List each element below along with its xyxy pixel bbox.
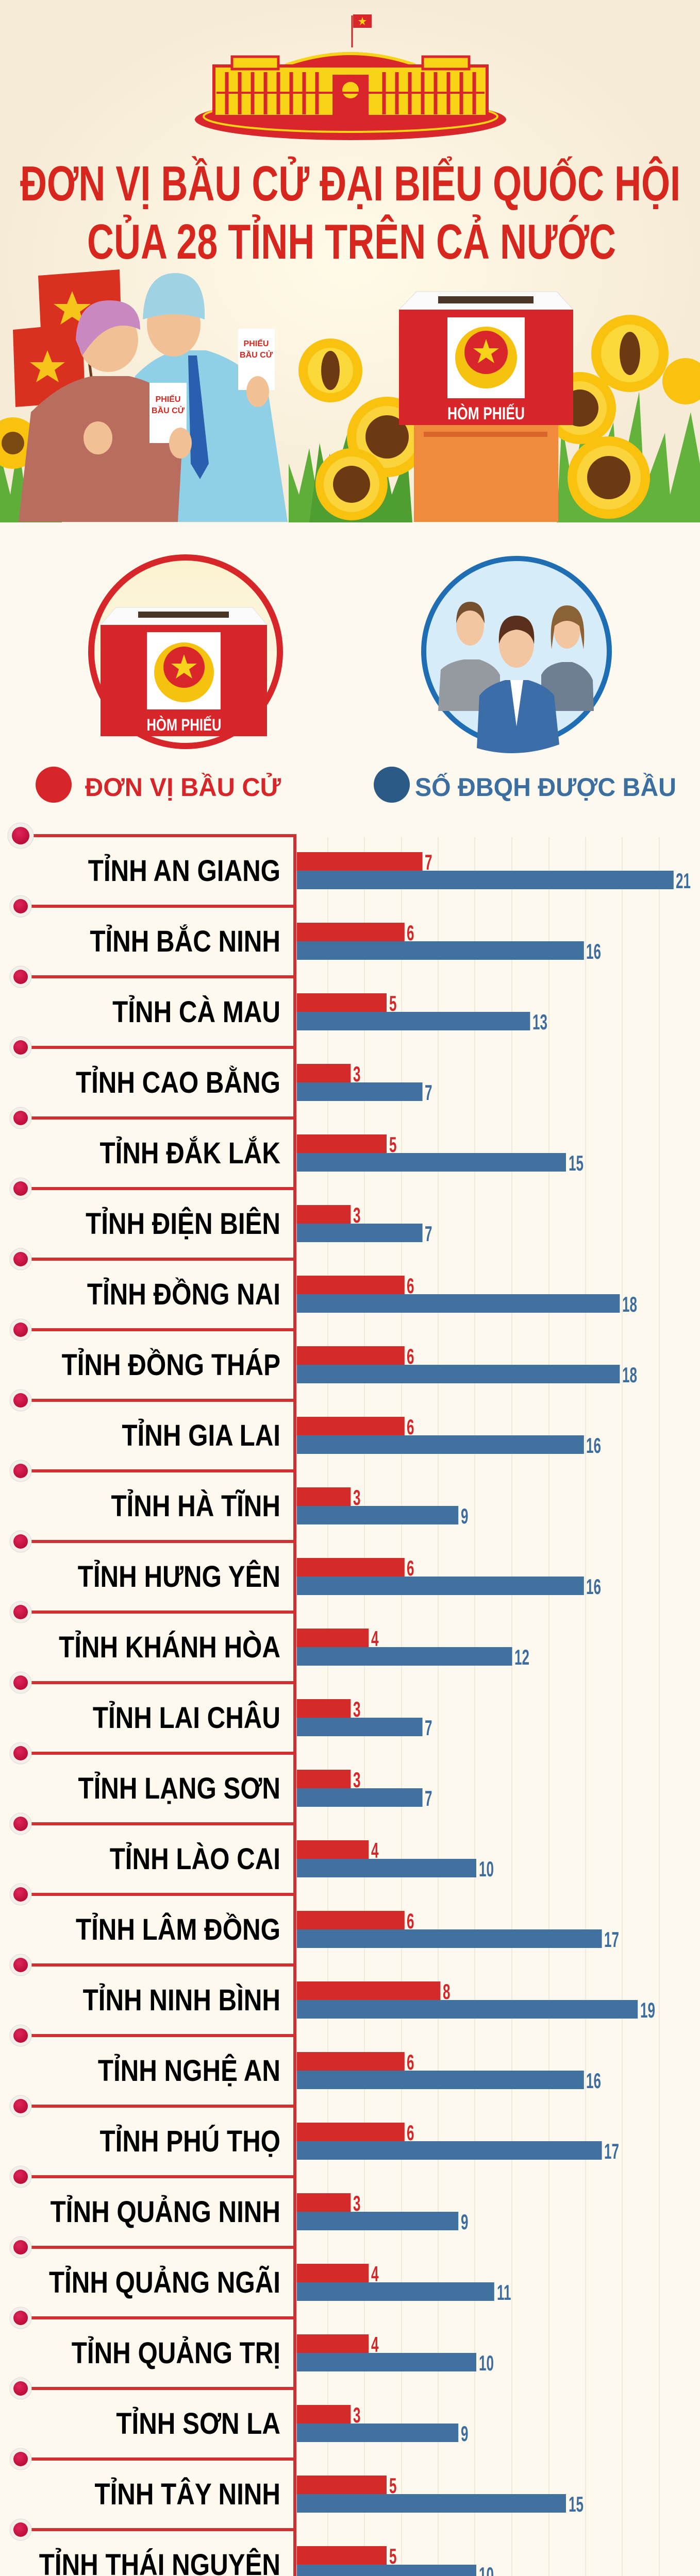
row: Đồng Tháp: 18 xyxy=(622,1363,637,1387)
row: Hà Tĩnh: 3 xyxy=(353,1486,360,1510)
illustration: woman voter xyxy=(19,300,192,522)
row: Điện Biên xyxy=(10,1178,432,1246)
row: An Giang xyxy=(8,823,691,893)
row: Cà Mau xyxy=(10,966,547,1035)
row: Đồng Tháp: 6 xyxy=(407,1345,414,1369)
row: Khánh Hòa: 12 xyxy=(514,1646,529,1670)
row: Điện Biên: 3 xyxy=(353,1204,360,1228)
illustration: woman voter: PHIẾU xyxy=(156,394,180,404)
illustration: sunflowers xyxy=(0,315,700,520)
row: Nghệ An: TỈNH NGHỆ AN xyxy=(98,2054,280,2088)
row: Hưng Yên xyxy=(10,1531,601,1599)
row: Khánh Hòa: TỈNH KHÁNH HÒA xyxy=(59,1631,280,1664)
row: Sơn La: 3 xyxy=(353,2403,360,2428)
row: Cà Mau: 13 xyxy=(532,1010,547,1035)
row: Lào Cai: 4 xyxy=(371,1839,379,1863)
row: Ninh Bình: TỈNH NINH BÌNH xyxy=(83,1984,280,2017)
row: Cao Bằng: 7 xyxy=(425,1081,432,1105)
row: Quảng Ninh: 9 xyxy=(461,2210,468,2234)
row: Gia Lai: 16 xyxy=(586,1434,601,1458)
row: Hưng Yên: 6 xyxy=(407,1556,414,1581)
row: Lào Cai xyxy=(10,1813,494,1882)
row: Lào Cai: TỈNH LÀO CAI xyxy=(110,1842,280,1876)
illustration: grass xyxy=(0,392,700,522)
row: Hưng Yên: TỈNH HƯNG YÊN xyxy=(78,1560,280,1594)
row: Bắc Ninh: 16 xyxy=(586,940,601,964)
row: Phú Thọ: 17 xyxy=(604,2140,619,2164)
row: An Giang: 7 xyxy=(425,851,432,875)
chart: rows xyxy=(8,823,691,2576)
row: Thái Nguyên xyxy=(10,2519,494,2576)
row: Quảng Ninh: TỈNH QUẢNG NINH xyxy=(51,2195,280,2229)
row: Lào Cai: 10 xyxy=(479,1857,494,1882)
row: Ninh Bình: 19 xyxy=(640,1998,655,2023)
row: Đồng Nai xyxy=(10,1248,637,1317)
title xyxy=(20,156,680,269)
illustration: ballot box: HÒM PHIẾU xyxy=(447,404,525,423)
row: Cao Bằng xyxy=(10,1037,432,1105)
row: Sơn La xyxy=(10,2378,468,2446)
row: Quảng Ninh: 3 xyxy=(353,2192,360,2216)
row: Hưng Yên: 16 xyxy=(586,1575,601,1599)
row: Hà Tĩnh: 9 xyxy=(461,1504,468,1529)
row: Quảng Ngãi: TỈNH QUẢNG NGÃI xyxy=(49,2266,280,2299)
row: Quảng Trị xyxy=(10,2307,494,2376)
row: Cà Mau: TỈNH CÀ MAU xyxy=(112,995,280,1029)
row: Bắc Ninh: TỈNH BẮC NINH xyxy=(90,924,280,958)
row: Tây Ninh: 5 xyxy=(389,2474,396,2498)
row: Quảng Ngãi: 11 xyxy=(497,2281,511,2305)
row: Quảng Trị: 4 xyxy=(371,2333,379,2357)
row: Tây Ninh: TỈNH TÂY NINH xyxy=(94,2477,280,2511)
row: Bắc Ninh: 6 xyxy=(407,921,414,945)
row: Gia Lai xyxy=(10,1389,601,1458)
row: Lạng Sơn: 3 xyxy=(353,1768,360,1792)
row: Thái Nguyên: 5 xyxy=(389,2545,396,2569)
legend: số đbqh được bầu xyxy=(374,767,676,803)
row: Sơn La: 9 xyxy=(461,2422,468,2446)
row: Phú Thọ: TỈNH PHÚ THỌ xyxy=(100,2125,280,2158)
row: Khánh Hòa: 4 xyxy=(371,1627,379,1651)
header background xyxy=(0,0,700,522)
legend: đơn vị bầu cử: ĐƠN VỊ BẦU CỬ xyxy=(85,772,281,802)
row: Bắc Ninh xyxy=(10,895,601,964)
row: Lâm Đồng: TỈNH LÂM ĐỒNG xyxy=(76,1912,280,1946)
row: Lâm Đồng: 17 xyxy=(604,1928,619,1952)
row: Nghệ An: 16 xyxy=(586,2069,601,2093)
row: Đồng Nai: 18 xyxy=(622,1293,637,1317)
row: Phú Thọ: 6 xyxy=(407,2121,414,2145)
row: Đắk Lắk: 15 xyxy=(569,1151,584,1176)
legend icon: ballot box circle: HÒM PHIẾU xyxy=(146,716,222,734)
row: Đắk Lắk: 5 xyxy=(389,1133,396,1157)
row: Cao Bằng: TỈNH CAO BẰNG xyxy=(76,1066,280,1099)
row: Đồng Nai: TỈNH ĐỒNG NAI xyxy=(87,1278,280,1311)
row: An Giang: TỈNH AN GIANG xyxy=(88,854,280,888)
row: Quảng Trị: TỈNH QUẢNG TRỊ xyxy=(72,2336,280,2370)
row: Gia Lai: TỈNH GIA LAI xyxy=(122,1419,280,1452)
row: Lâm Đồng xyxy=(10,1884,619,1952)
logo: national assembly building xyxy=(195,14,506,140)
row: Hà Tĩnh: TỈNH HÀ TĨNH xyxy=(111,1489,280,1523)
row: Nghệ An xyxy=(10,2025,601,2093)
row: Lai Châu: 3 xyxy=(353,1698,360,1722)
row: Ninh Bình: 8 xyxy=(443,1980,450,2004)
row: Quảng Ngãi xyxy=(10,2236,511,2305)
row: Đồng Tháp xyxy=(10,1319,637,1387)
row: Ninh Bình xyxy=(10,1954,655,2023)
row: Đồng Tháp: TỈNH ĐỒNG THÁP xyxy=(62,1348,280,1382)
row: Điện Biên: TỈNH ĐIỆN BIÊN xyxy=(86,1207,280,1241)
legend: đơn vị bầu cử xyxy=(36,767,281,803)
row: Lai Châu: TỈNH LAI CHÂU xyxy=(93,1701,280,1735)
row: Tây Ninh xyxy=(10,2448,584,2517)
row: An Giang: 21 xyxy=(676,869,691,893)
row: Tây Ninh: 15 xyxy=(569,2493,584,2517)
row: Lai Châu: 7 xyxy=(425,1716,432,1740)
row: Sơn La: TỈNH SƠN LA xyxy=(116,2407,280,2441)
row: Quảng Ninh xyxy=(10,2166,468,2234)
row: Gia Lai: 6 xyxy=(407,1415,414,1439)
row: Hà Tĩnh xyxy=(10,1460,468,1529)
illustration: man voter: PHIẾU xyxy=(244,338,269,348)
legend icon: ballot box circle xyxy=(91,557,280,746)
chart: grid lines xyxy=(328,837,659,2576)
row: Phú Thọ xyxy=(10,2095,619,2164)
illustration: ballot box xyxy=(399,292,573,522)
illustration: man voter: BẦU CỬ xyxy=(240,350,273,360)
legend: số đbqh được bầu: SỐ ĐBQH ĐƯỢC BẦU xyxy=(415,772,676,802)
illustration: flags xyxy=(13,269,122,428)
row: Đắk Lắk xyxy=(10,1107,584,1176)
chart: vertical axis line xyxy=(293,834,296,2576)
row: Đắk Lắk: TỈNH ĐẮK LẮK xyxy=(100,1136,280,1170)
row: Lạng Sơn: 7 xyxy=(425,1787,432,1811)
row: Điện Biên: 7 xyxy=(425,1222,432,1246)
row: Cà Mau: 5 xyxy=(389,992,396,1016)
row: Khánh Hòa xyxy=(10,1601,529,1670)
row: Đồng Nai: 6 xyxy=(407,1274,414,1298)
row: Lai Châu xyxy=(10,1672,432,1740)
row: Nghệ An: 6 xyxy=(407,2050,414,2075)
illustration: woman voter: BẦU CỬ xyxy=(152,405,185,415)
row: Cao Bằng: 3 xyxy=(353,1062,360,1087)
row: Quảng Ngãi: 4 xyxy=(371,2262,379,2286)
row: Lạng Sơn: TỈNH LẠNG SƠN xyxy=(78,1772,280,1805)
row: Lâm Đồng: 6 xyxy=(407,1909,414,1934)
row: Lạng Sơn xyxy=(10,1742,432,1811)
illustration: man voter xyxy=(129,273,288,522)
legend icon: delegates circle xyxy=(424,558,609,753)
row: Quảng Trị: 10 xyxy=(479,2351,494,2376)
